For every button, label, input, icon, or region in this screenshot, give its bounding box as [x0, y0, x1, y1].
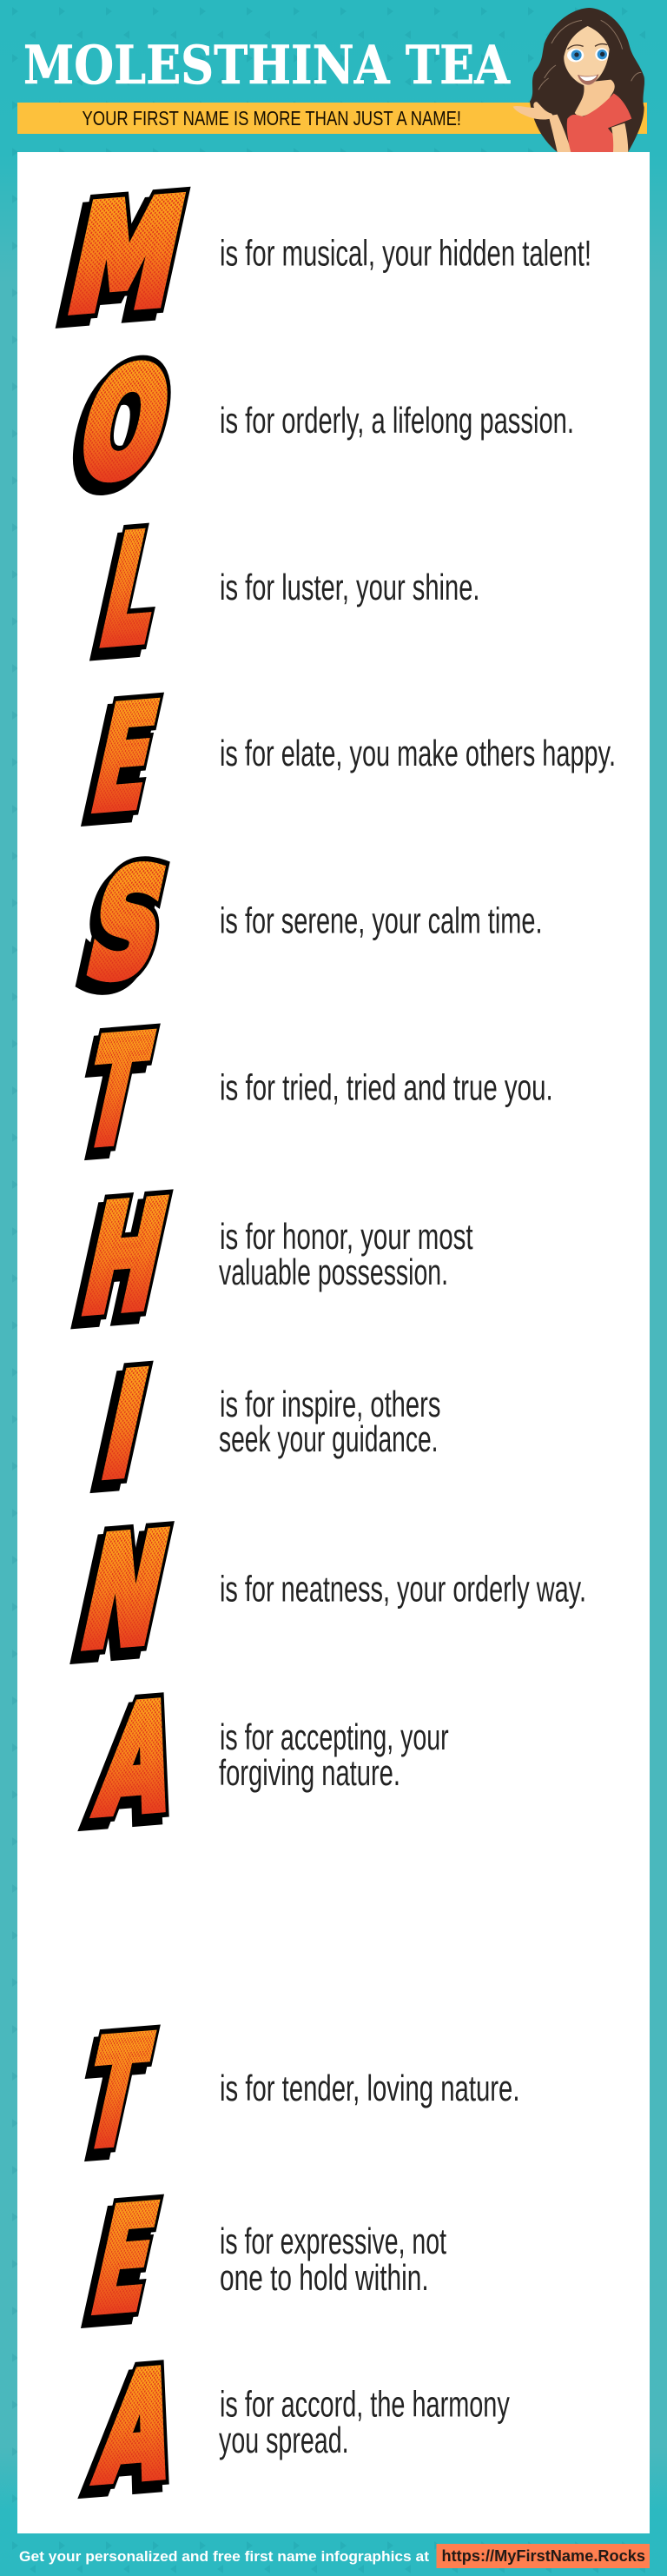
- letter T: T: [72, 1006, 159, 1178]
- letter O: O: [66, 336, 183, 512]
- letter H: H: [70, 1172, 179, 1345]
- description T: is for tender, loving nature.: [220, 2068, 519, 2108]
- description H: is for honor, your most: [220, 1216, 473, 1257]
- row: T (Tea): [66, 2008, 519, 2186]
- letter S: S: [68, 846, 172, 1019]
- description I: [219, 1384, 440, 1459]
- letter A: A: [89, 2340, 187, 2514]
- description A: [219, 1716, 449, 1793]
- letter T: T: [66, 2015, 153, 2186]
- description H: [219, 1216, 473, 1292]
- letter O: O: [66, 336, 183, 512]
- letter T: T: [72, 2008, 159, 2179]
- letter I: I: [81, 1348, 154, 1519]
- letter E: E: [79, 2175, 170, 2347]
- description E: [220, 2221, 446, 2298]
- letter I: I: [89, 1340, 161, 1511]
- row: I: [81, 1340, 440, 1519]
- subtitle banner: YOUR FIRST NAME IS MORE THAN JUST A NAME!: [82, 107, 461, 129]
- letter H: H: [70, 1172, 179, 1345]
- icon: cartoon woman presenting: [513, 8, 644, 152]
- letter N: N: [63, 1511, 173, 1689]
- letter E: E: [79, 2175, 170, 2347]
- letter E: E: [79, 674, 170, 846]
- letter E: E: [72, 681, 164, 853]
- letter A: A: [89, 1673, 187, 1847]
- description A: is for accepting, your: [220, 1716, 449, 1757]
- letter A: A: [89, 1673, 187, 1847]
- footer link badge: https://MyFirstName.Rocks: [441, 2547, 645, 2565]
- letter O: O: [59, 344, 176, 520]
- footer link badge: [436, 2544, 650, 2568]
- description E: one to hold within.: [220, 2257, 429, 2298]
- description A: [219, 2384, 510, 2460]
- letter E: E: [72, 2182, 164, 2354]
- letter A: A: [83, 1680, 180, 1854]
- description A: forgiving nature.: [219, 1752, 400, 1793]
- letter L: L: [83, 511, 168, 686]
- letter N: N: [69, 1504, 180, 1681]
- letter S: S: [75, 838, 180, 1012]
- letter T: T: [72, 1006, 159, 1178]
- row: E: [72, 674, 616, 853]
- description I: is for inspire, others: [220, 1384, 440, 1424]
- letter T: T: [72, 1006, 159, 1178]
- description A: you spread.: [219, 2420, 349, 2460]
- letter O: O: [66, 336, 183, 512]
- row: O: [59, 336, 574, 520]
- footer text: Get your personalized and free first name infographics at: [19, 2548, 429, 2565]
- description A: is for accord, the harmony: [220, 2384, 510, 2425]
- letter M: M: [56, 169, 196, 344]
- letter T: T: [66, 1013, 153, 1185]
- letter L: L: [89, 504, 175, 678]
- letter T: T: [72, 2008, 159, 2179]
- row: L: [83, 504, 479, 686]
- letter L: L: [89, 504, 175, 678]
- description E: is for expressive, not: [220, 2221, 446, 2261]
- letter H: H: [64, 1178, 172, 1352]
- letter T: T: [72, 2008, 159, 2179]
- description I: seek your guidance.: [219, 1418, 438, 1459]
- letter E: E: [79, 2175, 170, 2347]
- letter A: A: [83, 2347, 180, 2521]
- letter S: S: [75, 838, 180, 1012]
- letter I: I: [89, 1340, 161, 1511]
- letter A: A: [89, 2340, 187, 2514]
- letter M: M: [56, 169, 196, 344]
- letter E: E: [79, 674, 170, 846]
- row: A (Tea): [83, 2340, 510, 2521]
- row: A: [83, 1673, 449, 1854]
- description H: valuable possession.: [219, 1251, 448, 1292]
- letter L: L: [89, 504, 175, 678]
- subtitle banner: [17, 103, 647, 134]
- row: N: [63, 1504, 586, 1689]
- letter A: A: [89, 1673, 187, 1847]
- letter N: N: [69, 1504, 180, 1681]
- row: T: [66, 1006, 553, 1185]
- letter S: S: [75, 838, 180, 1012]
- row: M: [49, 169, 591, 352]
- letter N: N: [69, 1504, 180, 1681]
- title: MOLESTHINA TEA: [23, 35, 511, 96]
- row: S: [68, 838, 542, 1019]
- letter M: M: [56, 169, 196, 344]
- letter I: I: [89, 1340, 161, 1511]
- letter E: E: [79, 674, 170, 846]
- letter A: A: [89, 2340, 187, 2514]
- description L: is for luster, your shine.: [220, 567, 479, 607]
- letter H: H: [70, 1172, 179, 1345]
- row: H: [64, 1172, 473, 1352]
- row: E (Tea): [72, 2175, 446, 2354]
- letter M: M: [49, 176, 188, 352]
